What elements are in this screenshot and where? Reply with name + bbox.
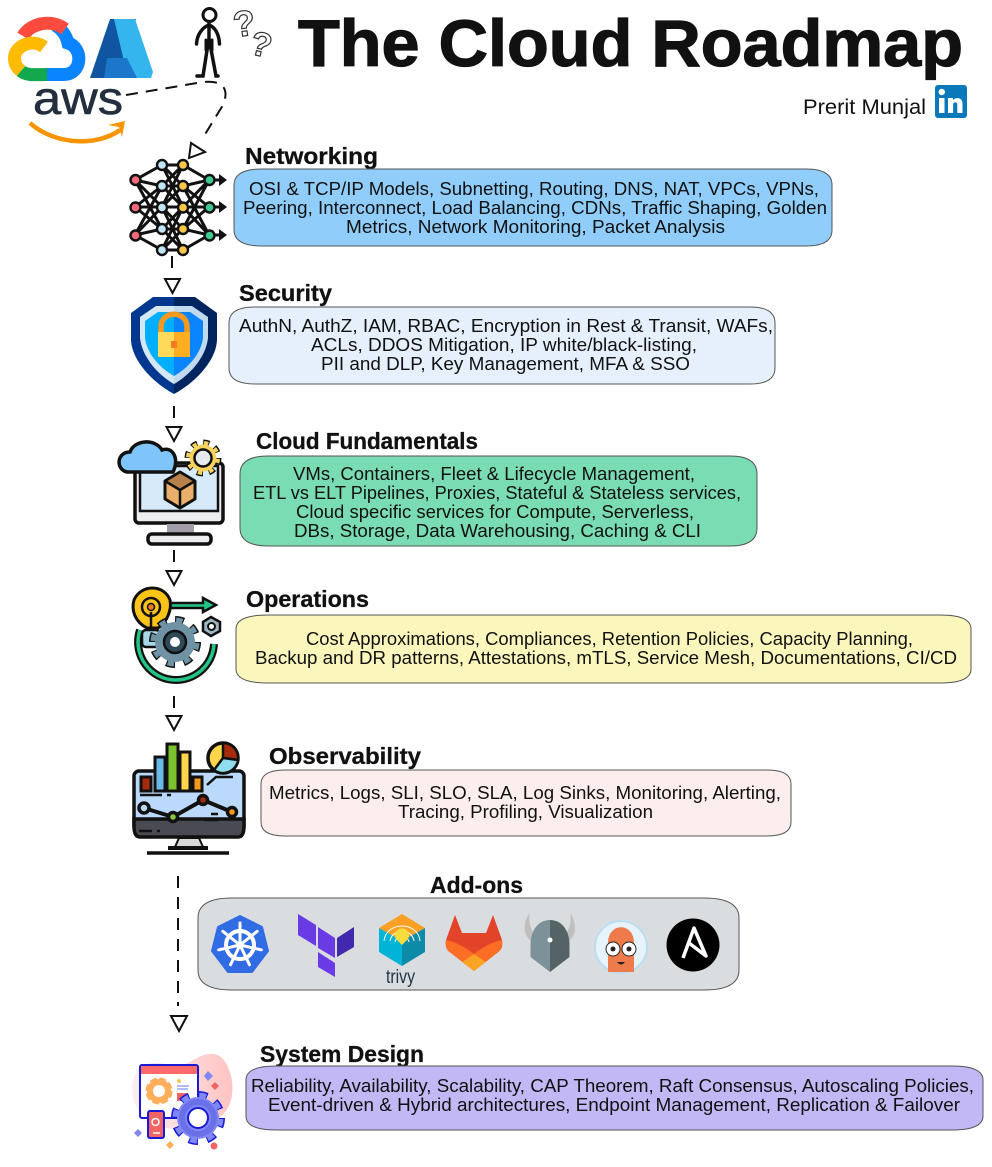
icon: trivy [379,914,425,988]
heading: add-ons: Add-ons [430,872,523,898]
icon: trivy: trivy [386,967,415,988]
panel: networking [234,169,832,246]
panel: networking: Metrics, Network Monitoring, Packet Analysis [346,217,725,237]
panel: add-ons [198,898,739,990]
panel: observability: Tracing, Profiling, Visualization [398,802,653,822]
icon: aws [30,72,125,141]
panel: networking: Peering, Interconnect, Load Balancing, CDNs, Traffic Shaping, Golden [243,198,827,218]
panel: cloud fundamentals: VMs, Containers, Fleet & Lifecycle Management, [293,464,695,484]
panel: system design [246,1066,983,1130]
icon: kubernetes [212,916,268,972]
panel: networking: OSI & TCP/IP Models, Subnetting, Routing, DNS, NAT, VPCs, VPNs, [249,179,819,199]
icon: opa [525,913,575,972]
icon: neural network [130,160,227,255]
arrow: networking to security [165,256,180,293]
icon: question marks [230,2,276,66]
icon: observability dashboard [134,743,244,853]
author name: Prerit Munjal [803,96,926,119]
panel: security: ACLs, DDOS Mitigation, IP white/black-listing, [311,335,697,355]
panel: cloud fundamentals: ETL vs ELT Pipelines, Proxies, Stateful & Stateless services, [253,483,741,503]
panel: security [229,307,775,384]
panel: cloud fundamentals [240,456,757,546]
panel: cloud fundamentals: Cloud specific services for Compute, Serverless, [296,502,694,522]
panel: observability [261,770,791,836]
heading: operations: Operations [246,586,369,612]
arrow: security to cloud fundamentals [166,406,182,441]
panel: system design: Event-driven & Hybrid architectures, Endpoint Management, Replication & Failover [268,1095,960,1115]
arrow: operations to observability [166,696,182,730]
icon: question marks: ? [246,24,276,66]
panel: operations: Backup and DR patterns, Attestations, mTLS, Service Mesh, Documentations, CI/CD [255,648,957,668]
icon: terraform [298,914,354,977]
icon: gitlab [446,915,502,971]
icon: shield [131,297,217,394]
heading: system design: System Design [260,1041,424,1067]
icon: stick figure [196,8,220,76]
icon: aws: aws [33,72,123,124]
icon: azure [90,19,153,78]
icon: google cloud [14,23,79,75]
icon: linkedin [935,85,967,118]
heading: observability: Observability [269,743,421,769]
panel: security: PII and DLP, Key Management, MFA & SSO [321,354,690,374]
icon: system design [132,1054,232,1150]
arrow: observability to system design [171,876,187,1031]
panel: operations: Cost Approximations, Compliances, Retention Policies, Capacity Planning, [306,629,913,649]
icon: question marks: ? [230,2,258,45]
heading: cloud fundamentals: Cloud Fundamentals [256,428,478,454]
panel: system design: Reliability, Availability, Scalability, CAP Theorem, Raft Consensus, Autoscaling Policies, [251,1076,974,1096]
panel: cloud fundamentals: DBs, Storage, Data Warehousing, Caching & CLI [294,521,701,541]
title: The Cloud Roadmap [298,6,963,80]
panel: operations [236,615,971,683]
arrow: start to networking [126,82,226,158]
arrow: cloud fundamentals to operations [166,550,182,585]
icon: operations [133,588,220,680]
panel: security: AuthN, AuthZ, IAM, RBAC, Encryption in Rest & Transit, WAFs, [239,316,773,336]
icon: ansible [666,918,720,972]
heading: networking: Networking [245,143,378,169]
icon: cloud monitor [119,442,223,544]
icon: argo [595,921,647,973]
panel: observability: Metrics, Logs, SLI, SLO, SLA, Log Sinks, Monitoring, Alerting, [269,783,781,803]
heading: security: Security [239,280,332,306]
